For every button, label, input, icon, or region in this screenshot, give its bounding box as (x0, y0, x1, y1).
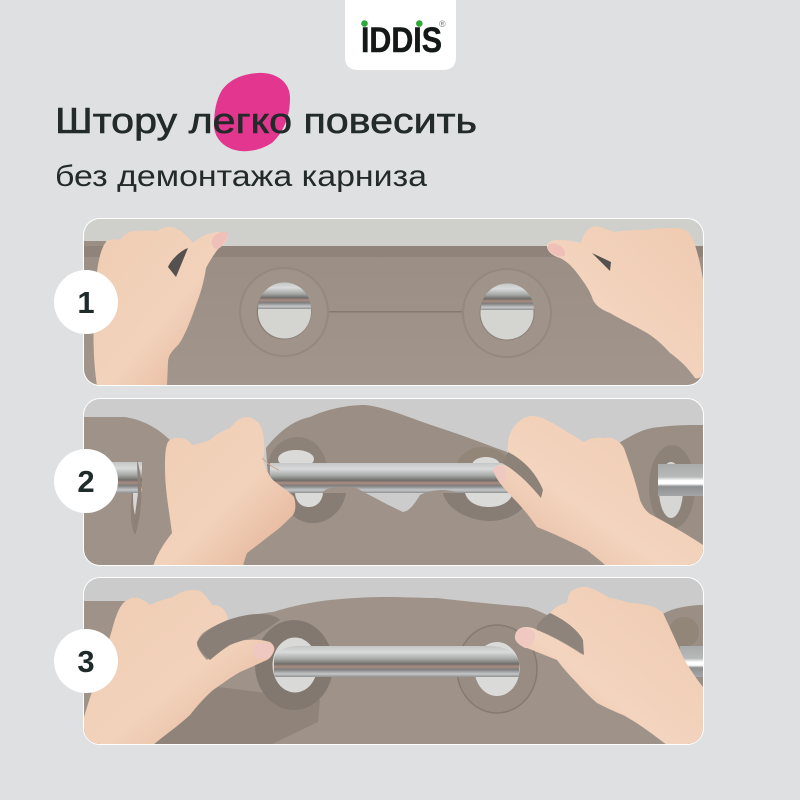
hand right (493, 416, 703, 566)
curtain lower (160, 487, 620, 566)
thumb nail (253, 643, 273, 659)
curtain (84, 241, 703, 386)
curtain (84, 597, 704, 745)
number badge 1 (54, 270, 118, 334)
number badge 2 (54, 449, 118, 513)
panel: step 1 (83, 218, 704, 386)
logo tab (345, 0, 456, 70)
panel: step 3 (83, 577, 704, 745)
panel: step 2 (83, 398, 704, 566)
hand left (94, 227, 228, 386)
number badge 3 (54, 629, 118, 693)
fabric fold (537, 613, 584, 655)
number badge 2: 2 (77, 464, 95, 499)
number badge 1: 1 (77, 285, 95, 320)
grommet left (255, 620, 333, 710)
number badge 3: 3 (77, 644, 95, 679)
curtain left (84, 417, 172, 566)
rod (274, 646, 519, 677)
logo green dots (361, 20, 423, 27)
thumb nail (493, 466, 506, 483)
hand right (547, 226, 703, 378)
hand right (515, 587, 703, 745)
curtain right (612, 425, 704, 566)
thumb nail (548, 243, 565, 256)
thumb nail (211, 232, 228, 249)
pink blob (214, 73, 290, 151)
title: Штору легко повесить (55, 100, 477, 141)
grommet right (462, 268, 552, 358)
hand left (153, 417, 295, 566)
grommet right (457, 625, 537, 713)
grommet left (239, 267, 329, 357)
curtain arch upper (266, 405, 515, 478)
fabric fold (197, 614, 280, 660)
logo registered mark: ® (439, 19, 446, 29)
thumb nail (515, 628, 535, 648)
rod (270, 463, 520, 493)
hand left (84, 590, 280, 745)
logo wordmark: IDDIS (361, 21, 442, 60)
subtitle: без демонтажа карниза (55, 160, 428, 193)
